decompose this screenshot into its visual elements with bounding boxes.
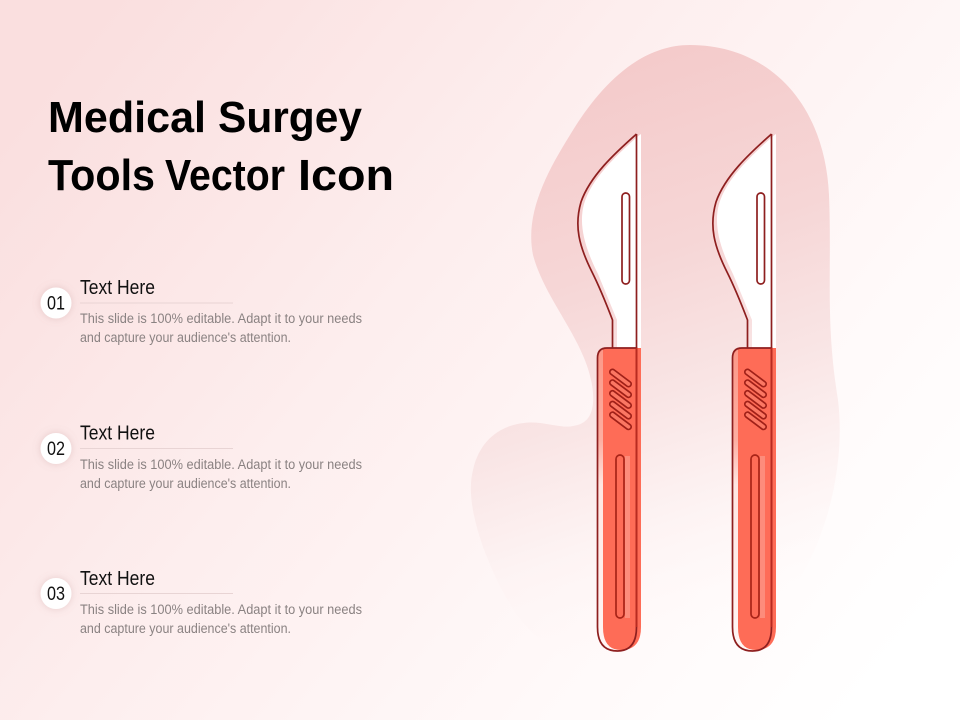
list item 02 bbox=[40, 422, 362, 491]
list item 01: and capture your audience's attention. bbox=[80, 330, 291, 345]
list item 01: This slide is 100% editable. Adapt it to your needs bbox=[80, 311, 362, 326]
list item 01: 01 bbox=[47, 294, 65, 314]
list item 02: and capture your audience's attention. bbox=[80, 476, 291, 491]
list item 02: 02 bbox=[47, 439, 65, 460]
list item 01: Text Here bbox=[80, 277, 155, 299]
list item 03 bbox=[40, 568, 362, 636]
title: Vector bbox=[165, 151, 285, 200]
title: Surgey bbox=[218, 93, 363, 142]
title bbox=[48, 93, 394, 200]
background blob bbox=[471, 45, 840, 690]
list item 03: This slide is 100% editable. Adapt it to your needs bbox=[80, 602, 362, 617]
title: Icon bbox=[298, 151, 394, 200]
list item 02: This slide is 100% editable. Adapt it to your needs bbox=[80, 457, 362, 472]
list item 03: 03 bbox=[47, 584, 65, 605]
title: Tools bbox=[48, 151, 155, 200]
title: Medical bbox=[48, 93, 206, 142]
list item 02: Text Here bbox=[80, 422, 155, 444]
icon: scalpel right bbox=[713, 134, 776, 651]
list item 01 bbox=[40, 277, 362, 345]
list item 03: and capture your audience's attention. bbox=[80, 621, 291, 636]
list item 03: Text Here bbox=[80, 568, 155, 590]
icon: scalpel left bbox=[578, 134, 641, 651]
